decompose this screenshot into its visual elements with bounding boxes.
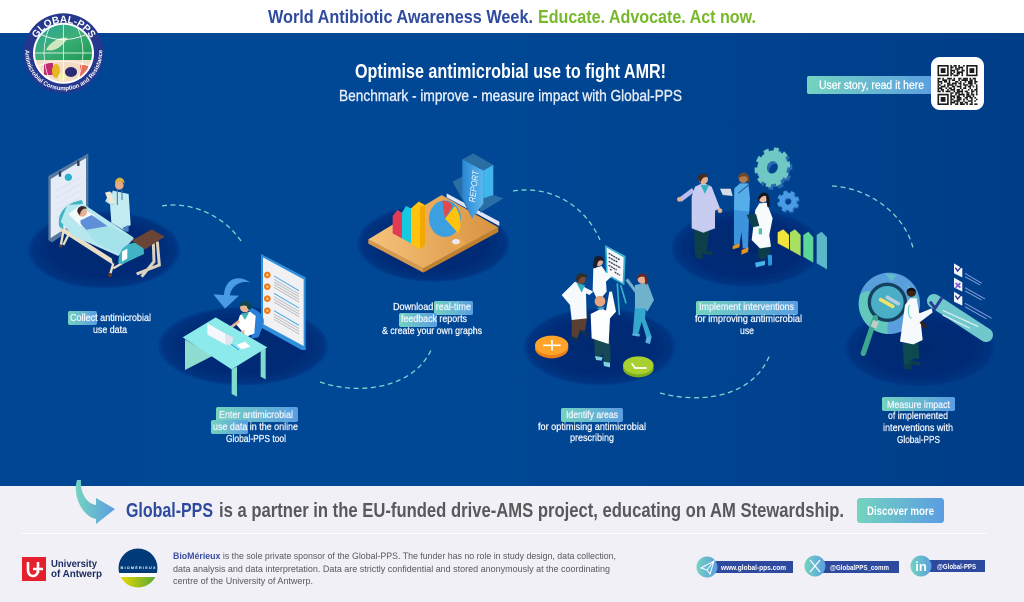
illustration: report board with charts: REPORT (467, 169, 481, 203)
label: enter data: Global-PPS tool (226, 434, 286, 445)
label: implement (695, 301, 802, 337)
user story callout (807, 57, 984, 110)
step 5: implement interventions (671, 145, 827, 337)
illustration: team with gears and bars (671, 145, 827, 287)
label: identify: Identify areas (566, 410, 618, 421)
step 3: download reports (357, 153, 509, 337)
Global-PPS logo: Antimicrobial Consumption and Resistance (25, 50, 102, 92)
label: download: Download real-time (393, 302, 471, 313)
label: identify: prescribing (570, 433, 614, 444)
label: implement: use (740, 326, 754, 337)
label: implement: for improving antimicrobial (695, 314, 802, 325)
illustration: report board with charts (357, 153, 509, 282)
label: download: feedback reports (401, 314, 467, 325)
label: collect: Collect antimicrobial (70, 313, 151, 324)
illustration: person at desk (158, 254, 328, 397)
label: download: & create your own graphs (382, 326, 482, 337)
label: enter data (211, 407, 298, 445)
sponsor disclaimer: data analysis and data interpretation. Data are strictly confidential and stored anonymously at the coordinating (173, 564, 610, 574)
sponsor disclaimer (173, 551, 616, 586)
label: measure (882, 397, 955, 446)
Global-PPS logo (24, 13, 104, 94)
partner statement: is a partner in the EU-funded drive-AMS project, educating on AM Stewardship. (219, 500, 844, 522)
step 4: identify areas (524, 245, 676, 444)
label: measure: interventions with (883, 423, 953, 434)
label: implement: Implement interventions (699, 302, 794, 313)
social: website: www.global-pps.com (720, 565, 786, 572)
label: download (382, 301, 482, 337)
icon: curved footer arrow (76, 480, 115, 524)
social: X (804, 556, 899, 576)
partner statement: Global-PPS (126, 500, 213, 522)
discover more button (857, 498, 944, 523)
University of Antwerp logo: University (51, 558, 97, 570)
QR code (931, 57, 984, 110)
dashed connector arrows (162, 186, 913, 398)
Global-PPS logo: GLOBAL-PPS (32, 16, 96, 38)
label: measure: of implemented (888, 411, 948, 422)
banner title: Educate. Advocate. Act now. (538, 7, 756, 27)
label: measure: Global-PPS (897, 435, 940, 446)
sponsor disclaimer: BioMérieux is the sole private sponsor of the Global-PPS. The funder has no role in study design, data collection, (173, 551, 616, 561)
step 6: measure impact (845, 263, 995, 446)
discover more button: Discover more (867, 506, 934, 518)
social: LinkedIn: in (915, 559, 927, 574)
social: LinkedIn (910, 556, 985, 576)
label: collect (68, 311, 151, 336)
step 1: collect data (28, 153, 180, 336)
blue main panel (0, 33, 1024, 486)
sub heading: Benchmark - improve - measure impact with Global-PPS (339, 88, 682, 105)
top white banner (0, 0, 1024, 33)
banner title (268, 7, 756, 27)
main heading: Optimise antimicrobial use to fight AMR! (355, 61, 666, 83)
label: enter data: Enter antimicrobial (219, 410, 293, 421)
illustration: magnifier and doctor with checklist (845, 263, 995, 387)
step 2: enter data (158, 254, 328, 445)
social: website (696, 556, 793, 578)
label: identify (538, 408, 646, 444)
label: identify: for optimising antimicrobial (538, 422, 646, 433)
banner title: World Antibiotic Awareness Week. (268, 7, 533, 27)
label: collect: use data (93, 325, 127, 336)
label: measure: Measure impact (887, 400, 950, 411)
user story callout: User story, read it here (819, 80, 924, 92)
illustration: hospital bed with doctor (28, 153, 180, 289)
social: LinkedIn: @Global-PPS (937, 564, 976, 571)
sponsor disclaimer: centre of the University of Antwerp. (173, 576, 313, 586)
social: X: @GlobalPPS_comm (830, 565, 889, 572)
label: enter data: use data in the online (213, 422, 298, 433)
University of Antwerp logo (22, 557, 102, 581)
bioMerieux logo (118, 548, 158, 589)
illustration: team at whiteboard (524, 245, 676, 385)
footer panel (0, 486, 1024, 602)
University of Antwerp logo: of Antwerp (51, 568, 102, 580)
bioMerieux logo: BIOMÉRIEUX (120, 565, 156, 570)
